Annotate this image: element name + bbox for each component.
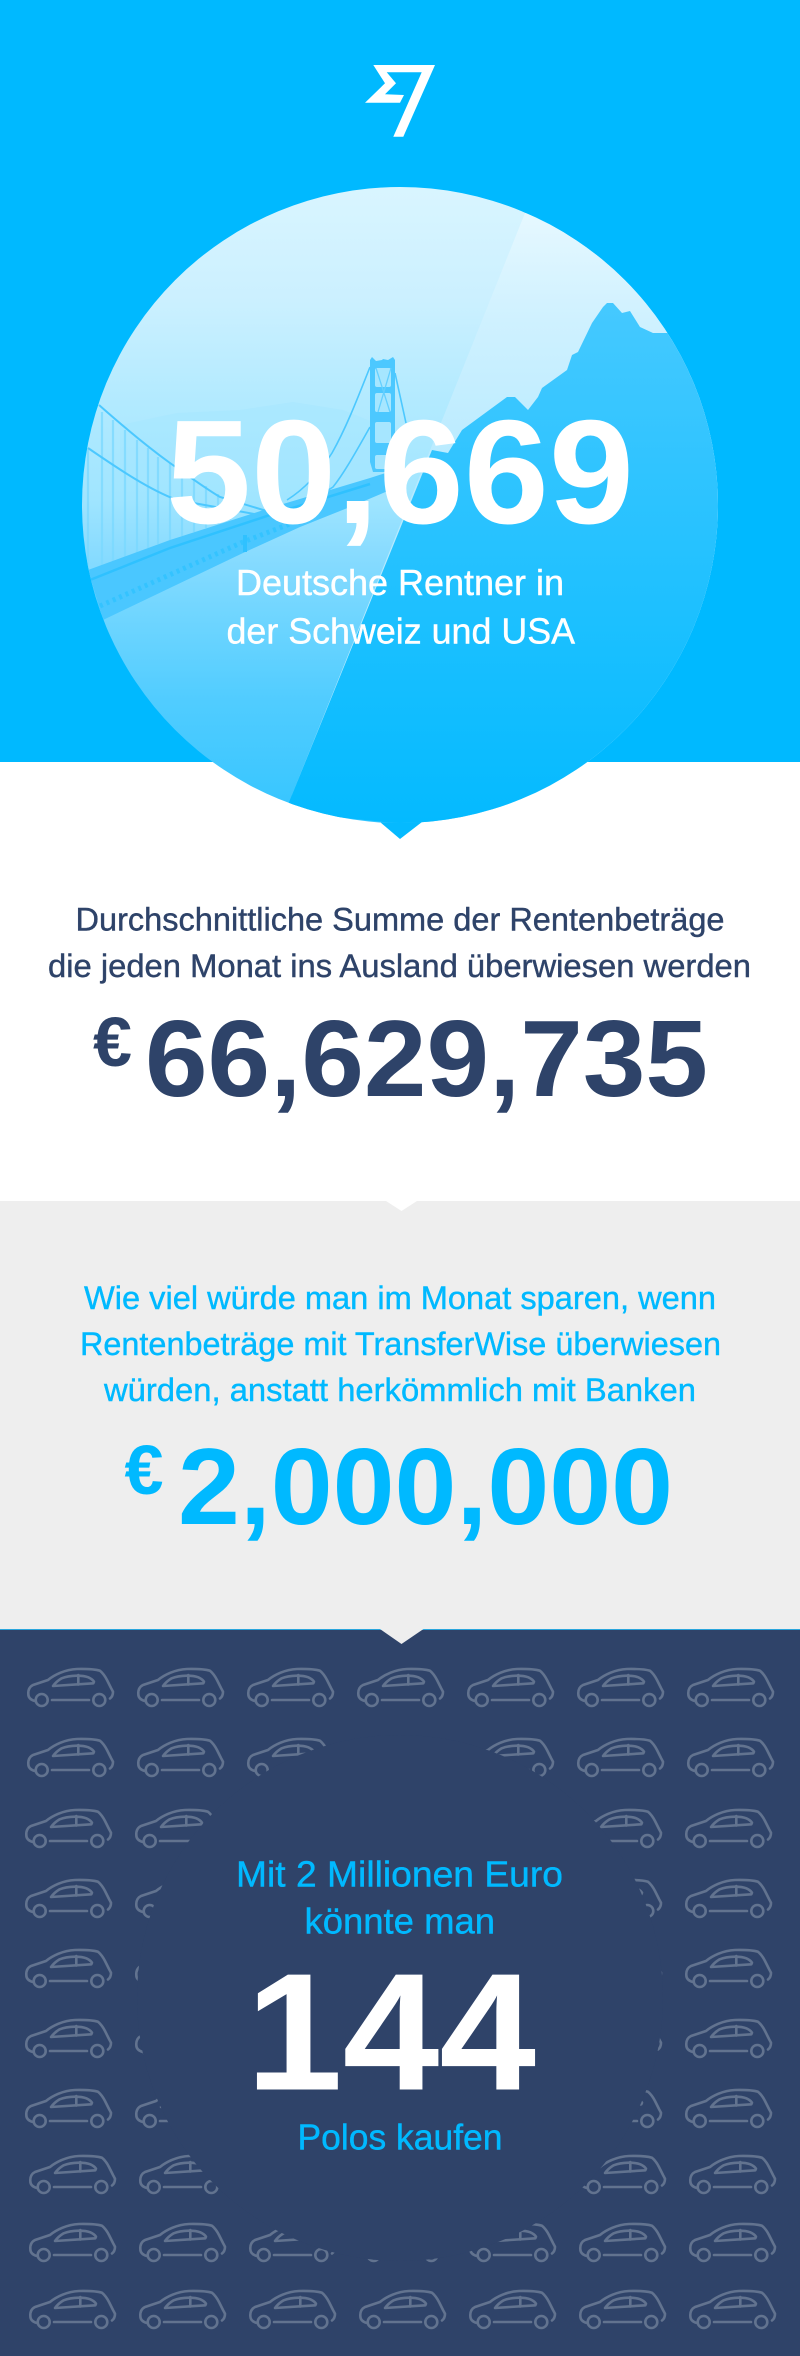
right photo: sky and mountain [288,213,718,823]
heading [48,902,751,984]
grey section tip [380,1629,424,1644]
photo circle: bridge and mountain [80,186,760,860]
heading: Rentenbeträge mit TransferWise überwiesen [80,1326,721,1362]
speech-bubble tip under circle [380,822,422,839]
left photo: bridge [80,186,720,826]
panel: polos [0,1629,800,2356]
hero caption: der Schweiz und USA [226,610,575,652]
car pattern [26,1669,775,2328]
heading [80,1280,721,1408]
bridge tower [370,357,395,472]
hero caption: Deutsche Rentner in [236,562,564,603]
text below figure: Polos kaufen [298,2116,502,2158]
euro sign: € [93,1003,132,1081]
white section tip [386,1201,417,1211]
heading: Durchschnittliche Summe der Rentenbeträge [76,902,724,938]
figure: 144: 144 [246,1940,536,2126]
text above figure: könnte man [304,1900,495,1942]
euro sign: € [124,1431,164,1509]
amount: 2,000,000 [178,1426,673,1548]
bridge deck [88,470,395,620]
icon: TransferWise logo [365,65,435,137]
heading: Wie viel würde man im Monat sparen, wenn [84,1280,716,1316]
distant hills [120,402,380,480]
heading: die jeden Monat ins Ausland überwiesen werden [48,948,751,984]
heading: würden, anstatt herkömmlich mit Banken [103,1372,696,1408]
text above figure [236,1854,563,1942]
text above figure: Mit 2 Millionen Euro [236,1854,563,1894]
panel: hero blue background [0,0,800,762]
amount: 66,629,735 [145,998,708,1120]
hero figure: 50,669 [166,390,634,555]
navy circle behind text [137,1735,663,2261]
panel: monthly pension total [48,902,751,1120]
hero caption [226,562,575,652]
panel: savings [0,1201,800,1630]
